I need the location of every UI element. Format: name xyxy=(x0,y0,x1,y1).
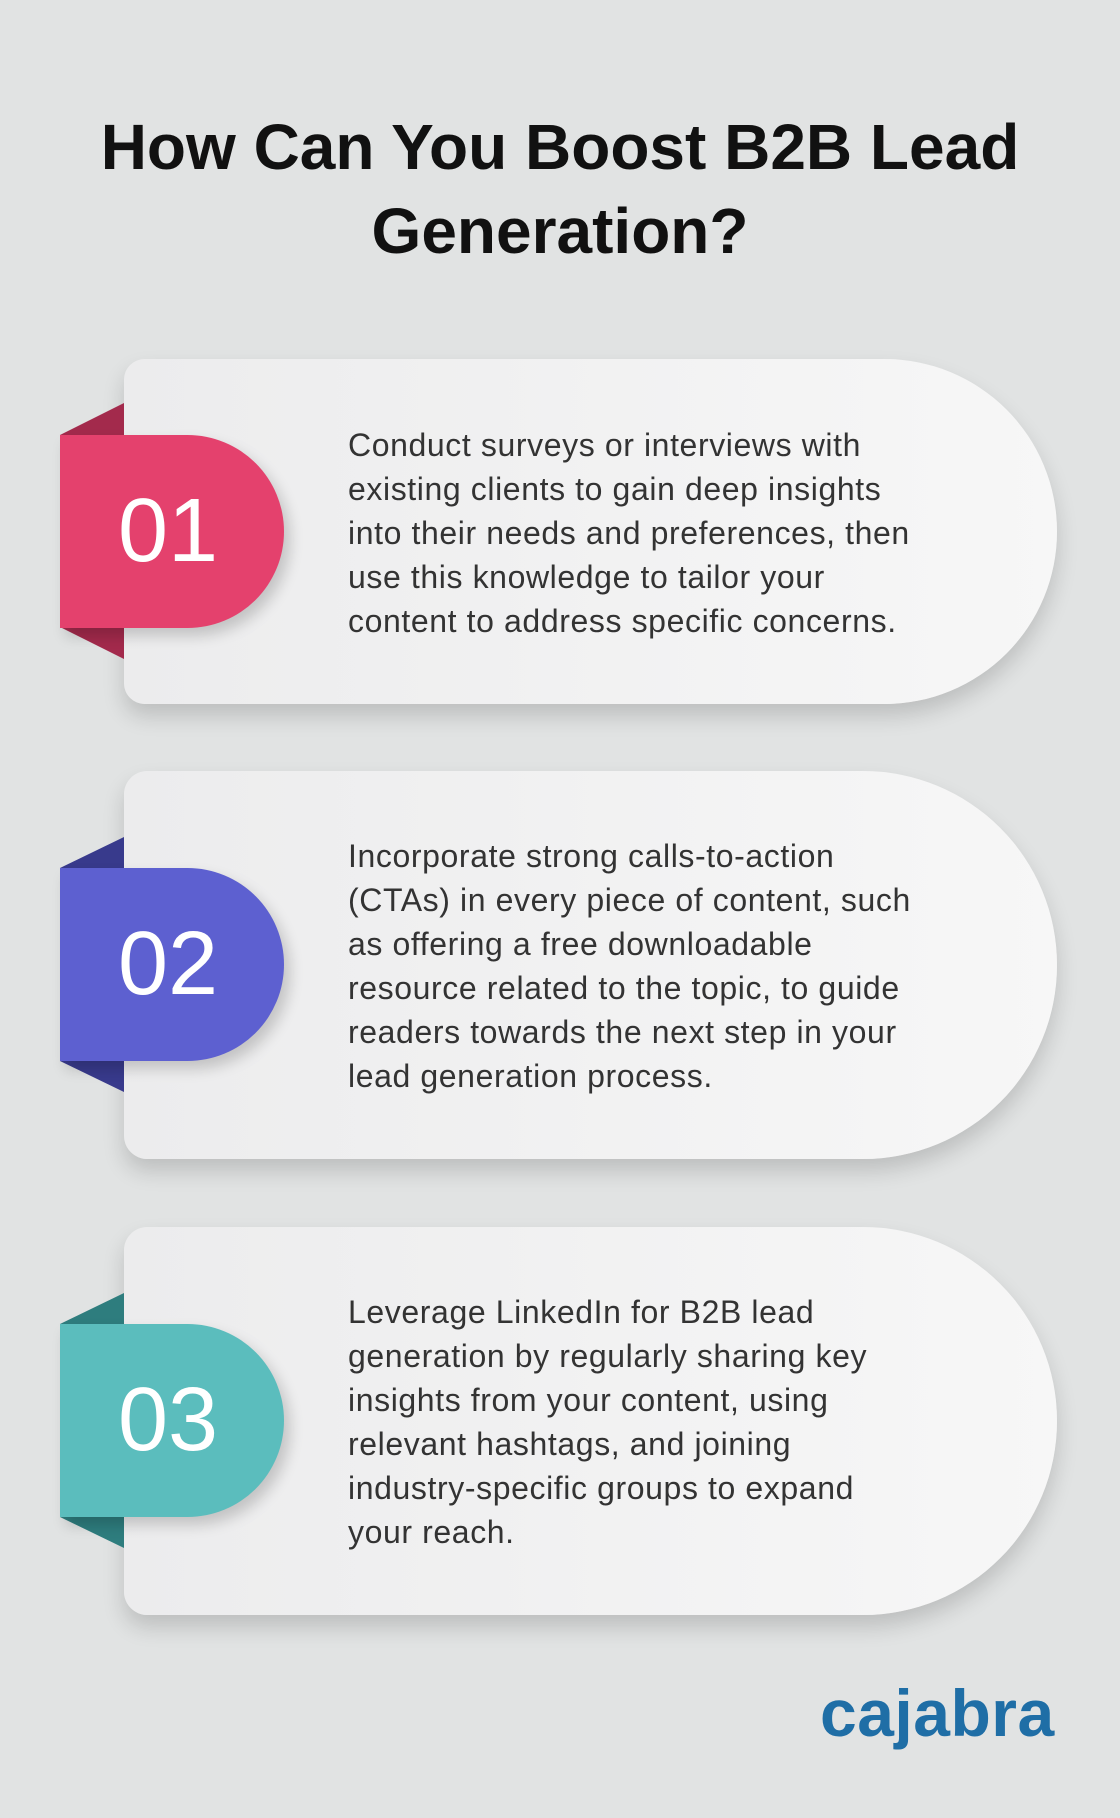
badge 02: 02 xyxy=(118,914,218,1014)
text 3: relevant hashtags, and joining xyxy=(348,1426,791,1462)
text 2: as offering a free downloadable xyxy=(348,926,813,962)
text 3: industry-specific groups to expand xyxy=(348,1470,854,1506)
title: Generation? xyxy=(372,195,748,267)
text 1: use this knowledge to tailor your xyxy=(348,559,825,595)
card 2 xyxy=(124,771,1057,1159)
card 1 xyxy=(124,359,1057,704)
text 1: existing clients to gain deep insights xyxy=(348,471,881,507)
text 2: lead generation process. xyxy=(348,1058,713,1094)
fold bottom 3 xyxy=(60,1517,124,1548)
panel: step 2 xyxy=(60,771,1064,1178)
panel: step 1 xyxy=(60,359,1064,724)
fold top 3 xyxy=(60,1293,124,1324)
text 3: insights from your content, using xyxy=(348,1382,828,1418)
fold top 1 xyxy=(60,403,124,435)
text 1: Conduct surveys or interviews with xyxy=(348,427,861,463)
title xyxy=(101,111,1019,267)
badge 01 xyxy=(60,435,284,628)
text 2: (CTAs) in every piece of content, such xyxy=(348,882,911,918)
title: How Can You Boost B2B Lead xyxy=(101,111,1019,183)
text 3 xyxy=(348,1294,867,1550)
text 1: into their needs and preferences, then xyxy=(348,515,910,551)
text 3: your reach. xyxy=(348,1514,515,1550)
text 1: content to address specific concerns. xyxy=(348,603,897,639)
text 2: readers towards the next step in your xyxy=(348,1014,897,1050)
badge 01: 01 xyxy=(118,481,218,581)
text 3: generation by regularly sharing key xyxy=(348,1338,867,1374)
text 2 xyxy=(348,838,911,1094)
text 2: resource related to the topic, to guide xyxy=(348,970,900,1006)
fold top 2 xyxy=(60,837,124,868)
text 2: Incorporate strong calls-to-action xyxy=(348,838,834,874)
card 3 xyxy=(124,1227,1057,1615)
text 3: Leverage LinkedIn for B2B lead xyxy=(348,1294,814,1330)
badge 02 xyxy=(60,868,284,1061)
panel: step 3 xyxy=(60,1227,1064,1634)
badge 03 xyxy=(60,1324,284,1517)
fold bottom 1 xyxy=(60,627,124,659)
text 1 xyxy=(348,427,910,639)
badge 03: 03 xyxy=(118,1370,218,1470)
logo: cajabra xyxy=(820,1676,1055,1750)
fold bottom 2 xyxy=(60,1061,124,1092)
